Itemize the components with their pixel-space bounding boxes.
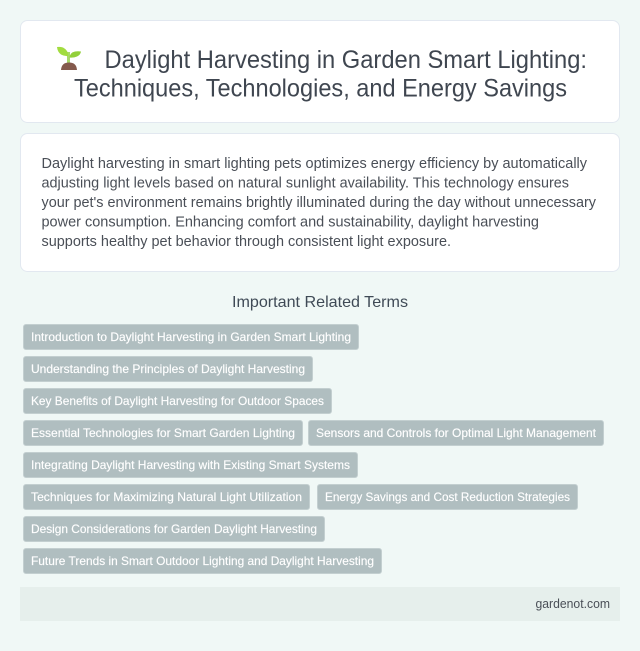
tag (308, 420, 604, 446)
panel: summary card (20, 134, 620, 272)
summary text (42, 156, 597, 250)
title: Daylight Harvesting in Garden Smart Lighting: (104, 46, 587, 74)
tag list (24, 324, 604, 574)
title: Techniques, Technologies, and Energy Savings (74, 74, 567, 102)
tag: Future Trends in Smart Outdoor Lighting and Daylight Harvesting (31, 554, 374, 568)
icon: seedling (57, 47, 81, 70)
tag: Design Considerations for Garden Daylight Harvesting (31, 522, 317, 536)
tag: Understanding the Principles of Daylight Harvesting (31, 362, 305, 376)
panel: title card (20, 20, 620, 122)
footer bar (20, 587, 620, 621)
tag: Techniques for Maximizing Natural Light Utilization (31, 490, 302, 504)
tag: Introduction to Daylight Harvesting in Garden Smart Lighting (31, 330, 351, 344)
tag: Key Benefits of Daylight Harvesting for Outdoor Spaces (31, 394, 324, 408)
tag (24, 356, 312, 382)
footer source: gardenot.com (536, 597, 610, 611)
tag (24, 324, 358, 350)
tag (318, 484, 578, 510)
heading: important related terms: Important Related Terms (232, 294, 408, 311)
summary text: your pet's environment remains brightly illuminated during the day without unnecessary (42, 195, 597, 211)
tag: Essential Technologies for Smart Garden Lighting (31, 426, 295, 440)
tag (24, 484, 310, 510)
title (74, 46, 587, 102)
tag (24, 548, 382, 574)
tag (24, 452, 358, 478)
summary text: supports healthy pet behavior through consistent light exposure. (42, 234, 451, 250)
tag (24, 388, 332, 414)
summary text: power consumption. Enhancing comfort and sustainability, daylight harvesting (42, 214, 539, 230)
tag (24, 516, 324, 542)
tag (24, 420, 302, 446)
summary text: Daylight harvesting in smart lighting pets optimizes energy efficiency by automatically (42, 156, 588, 172)
summary text: adjusting light levels based on natural sunlight availability. This technology ensures (42, 176, 569, 192)
tag: Energy Savings and Cost Reduction Strategies (325, 490, 570, 504)
tag: Sensors and Controls for Optimal Light Management (316, 426, 597, 440)
tag: Integrating Daylight Harvesting with Existing Smart Systems (31, 458, 350, 472)
